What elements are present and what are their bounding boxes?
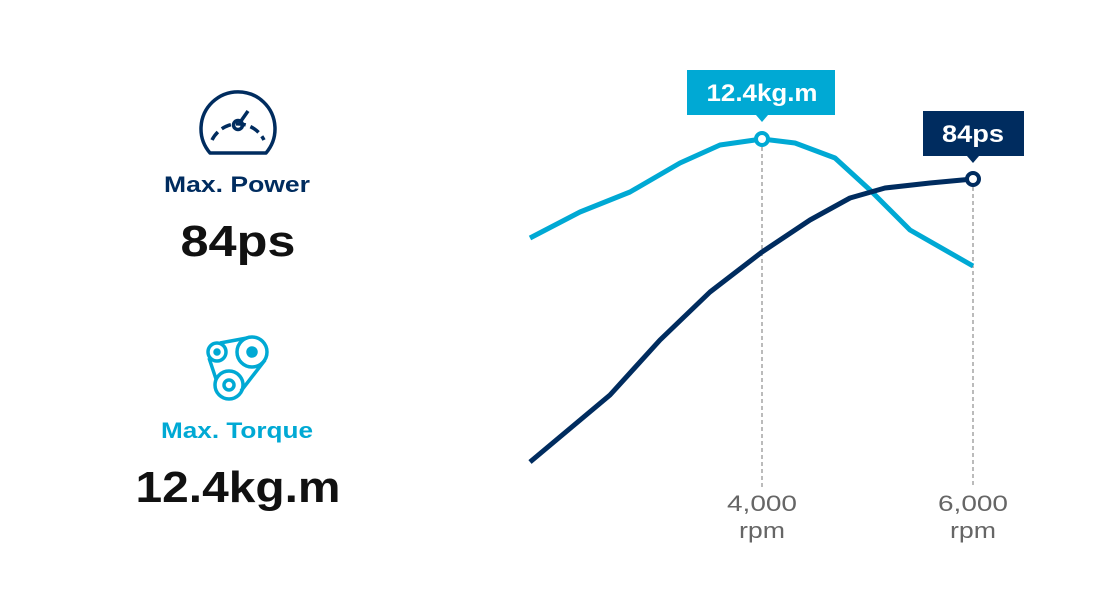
icon: belt pulleys (208, 337, 267, 399)
x labels: rpm (950, 518, 996, 543)
callout: torque: 12.4kg.m (706, 80, 818, 107)
value: 12.4kg.m: 12.4kg.m (136, 463, 340, 512)
heading: max power: Max. Power (164, 172, 311, 197)
callout: power: 84ps (942, 121, 1004, 148)
value: 84ps: 84ps (180, 217, 296, 266)
callout: torque (687, 70, 835, 122)
chart (530, 70, 1024, 543)
x labels (727, 491, 1008, 543)
x labels: 4,000 (727, 491, 797, 516)
x labels: 6,000 (938, 491, 1008, 516)
callout: power (923, 111, 1024, 163)
heading: max torque: Max. Torque (161, 418, 313, 443)
x labels: rpm (739, 518, 785, 543)
icon: speedometer (201, 92, 275, 153)
torque curve (530, 139, 973, 266)
power curve (530, 179, 973, 462)
